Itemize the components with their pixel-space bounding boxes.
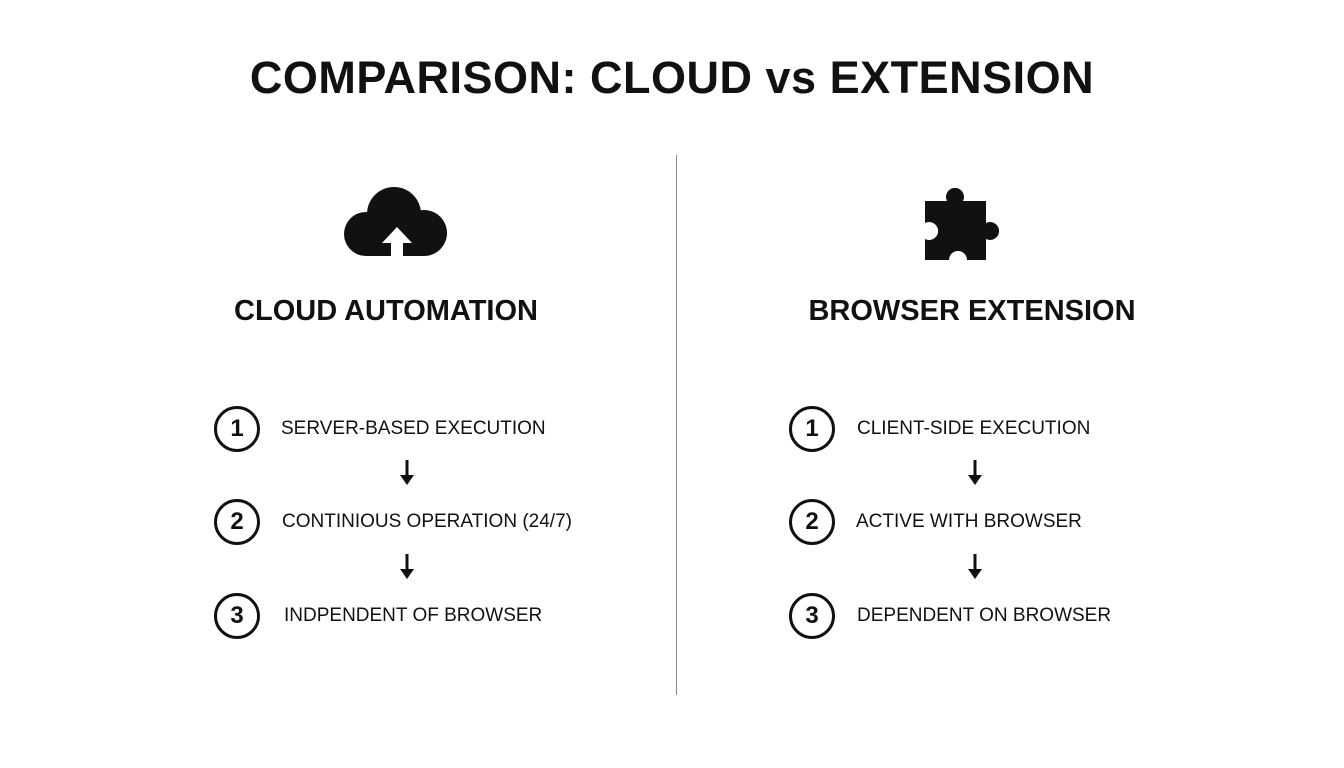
step 2: 2 — [805, 508, 819, 535]
step 3: INDPENDENT OF BROWSER — [284, 605, 542, 626]
heading: extension: BROWSER EXTENSION — [808, 295, 1136, 327]
title: COMPARISON: CLOUD vs EXTENSION — [250, 52, 1094, 103]
step 1 — [214, 406, 546, 452]
heading: cloud: CLOUD AUTOMATION — [234, 295, 538, 327]
step 3 — [214, 593, 542, 639]
panel: cloud — [214, 187, 572, 639]
arrow 2 — [400, 554, 414, 579]
step 2: CONTINIOUS OPERATION (24/7) — [282, 511, 572, 532]
arrow 1 — [400, 460, 414, 485]
step 3: 3 — [805, 602, 819, 629]
step 1 — [789, 406, 1090, 452]
step 2: 2 — [230, 508, 244, 535]
divider — [676, 155, 677, 695]
step 3: 3 — [230, 602, 244, 629]
step 1: 1 — [805, 415, 819, 442]
arrow 2 — [968, 554, 982, 579]
panel: extension — [789, 188, 1136, 639]
icon: cloud upload — [344, 187, 447, 256]
step 2 — [789, 499, 1082, 545]
step 1: CLIENT-SIDE EXECUTION — [857, 418, 1090, 439]
step 2 — [214, 499, 572, 545]
step 2: ACTIVE WITH BROWSER — [856, 511, 1082, 532]
step 3 — [789, 593, 1111, 639]
step 3: DEPENDENT ON BROWSER — [857, 605, 1111, 626]
step 1: 1 — [230, 415, 244, 442]
step 1: SERVER-BASED EXECUTION — [281, 418, 546, 439]
arrow 1 — [968, 460, 982, 485]
icon: puzzle — [925, 188, 1000, 260]
